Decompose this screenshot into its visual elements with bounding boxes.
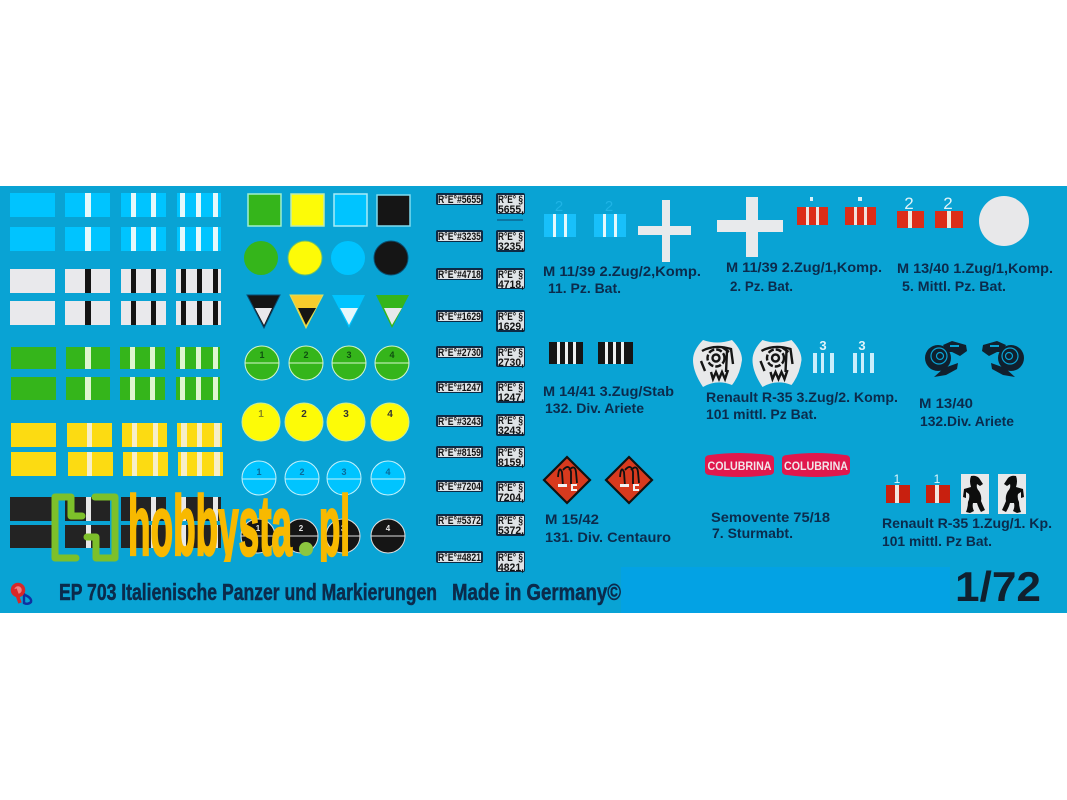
- icon: elephant shield left: [693, 340, 742, 387]
- icon: diamond right: [606, 457, 652, 503]
- numbered yellow discs: 1: [258, 409, 264, 420]
- scale: 1/72: [955, 563, 1041, 610]
- panel: long number plates: R°E°#8159: [438, 447, 481, 459]
- panel: M 13/40 132.Div. Ariete: [919, 341, 1024, 429]
- panel: M 15/42 131. Div. Centauro: [544, 457, 671, 545]
- panel: M 11/39 2.Zug/2.Komp.: 11. Pz. Bat.: [548, 280, 621, 296]
- decal sheet background: [0, 186, 1067, 613]
- panel: Semovente 75/18: [705, 453, 850, 541]
- numbered black discs: 3: [341, 524, 346, 533]
- panel: M 15/42 131. Div. Centauro: M 15/42: [545, 511, 599, 527]
- numbered blue discs: 2: [299, 467, 305, 477]
- panel: square number plates: R°E° §: [498, 482, 523, 494]
- numbered yellow discs: 3: [343, 409, 349, 420]
- panel: Renault R-35 3.Zug/2.Komp.: Renault R-35 3.Zug/2. Komp.: [706, 389, 898, 405]
- colour discs: [244, 241, 408, 275]
- yellow stripes: [11, 423, 223, 476]
- panel: M 11/39 2.Zug/2.Komp.: M 11/39 2.Zug/2,Komp.: [543, 263, 701, 279]
- numbered blue discs: 1: [256, 467, 262, 477]
- numbered blue discs: 4: [385, 467, 391, 477]
- panel: M 11/39 2.Zug/2.Komp.: 2: [605, 198, 613, 215]
- panel: Renault R-35 3.Zug/2.Komp.: 101 mittl. Pz Bat.: [706, 406, 817, 422]
- watermark logo bracket: [55, 497, 115, 558]
- panel: square number plates: 3243,: [498, 425, 524, 437]
- icon: prancing horse left: [961, 474, 989, 514]
- panel: square number plates: R°E° §: [498, 347, 523, 359]
- panel: stripe rank markings: [10, 193, 223, 548]
- panel: M 11/39 2.Zug/1.Komp.: [717, 197, 882, 294]
- panel: square number plates: R°E° §: [498, 447, 523, 459]
- lighter scale strip: [621, 567, 950, 613]
- panel: M 13/40 1.Zug/1.Komp.: 2: [904, 194, 914, 213]
- panel: long number plates: R°E°#4718: [438, 269, 481, 281]
- panel: long number plates: R°E°#4821: [438, 552, 481, 564]
- panel: square number plates: 4821,: [498, 562, 524, 574]
- numbered black discs: [241, 519, 405, 553]
- panel: Semovente 75/18: 7. Sturmabt.: [712, 525, 793, 541]
- panel: square number plates: R°E° §: [498, 382, 523, 394]
- panel: M 11/39 2.Zug/2.Komp.: 2: [555, 198, 563, 215]
- panel: Renault R-35 3.Zug/2.Komp.: 3: [858, 338, 866, 353]
- panel: square number plates: R°E° §: [498, 194, 523, 206]
- triangles: [247, 295, 409, 328]
- footer title: EP 703 Italienische Panzer und Markierungen: [59, 579, 437, 605]
- watermark: hobbysta.pl: hobbysta: [128, 479, 293, 573]
- numbered green discs: 2: [303, 350, 309, 360]
- numbered black discs: 2: [299, 524, 304, 533]
- panel: square number plates: R°E° §: [498, 269, 523, 281]
- colour squares: [248, 194, 410, 226]
- COLUBRINA badge right: [782, 453, 850, 477]
- panel: square number plates: R°E° §: [498, 311, 523, 323]
- numbered blue discs: [242, 461, 405, 495]
- panel: square number plates: 5655,: [498, 204, 524, 216]
- COLUBRINA badge left: [705, 453, 774, 477]
- white stripes: [10, 269, 221, 325]
- panel: M 14/41 3.Zug/Stab: [543, 342, 674, 416]
- icon: PD maker logo: [12, 584, 31, 604]
- numbered yellow discs: 2: [301, 409, 307, 420]
- panel: square number plates: 2730,: [498, 357, 524, 369]
- panel: square number plates: [496, 193, 525, 574]
- panel: square number plates: R°E° §: [498, 415, 523, 427]
- panel: long number plates: R°E°#5372: [438, 515, 481, 527]
- COLUBRINA badge right: COLUBRINA: [784, 459, 848, 473]
- panel: long number plates: R°E°#5655: [438, 194, 481, 206]
- panel: square number plates: 1247,: [498, 392, 524, 404]
- text: pl: [319, 479, 350, 573]
- panel: Renault R-35 3.Zug/2.Komp.: 3: [819, 338, 827, 353]
- watermark: hobbysta.pl: [52, 492, 348, 562]
- icon: diamond left: [544, 457, 590, 503]
- panel: M 14/41 3.Zug/Stab: M 14/41 3.Zug/Stab: [543, 383, 674, 399]
- panel: long number plates: [436, 193, 483, 564]
- panel: M 13/40 1.Zug/1.Komp.: [897, 194, 1053, 294]
- panel: M 13/40 1.Zug/1.Komp.: 2: [943, 194, 953, 213]
- panel: long number plates: R°E°#1247: [438, 382, 481, 394]
- panel: Renault R-35 1.Zug/1. Kp.: 1: [934, 472, 941, 486]
- panel: long number plates: R°E°#3243: [438, 416, 481, 428]
- panel: Renault R-35 1.Zug/1. Kp.: 101 mittl. Pz Bat.: [882, 533, 992, 549]
- panel: Renault R-35 1.Zug/1. Kp.: 1: [894, 472, 901, 486]
- panel: M 13/40 132.Div. Ariete: M 13/40: [919, 395, 973, 411]
- icon: prancing horse right: [998, 474, 1026, 514]
- panel: square number plates: 4718,: [498, 279, 524, 291]
- panel: square number plates: 8159,: [498, 457, 524, 469]
- panel: long number plates: R°E°#7204: [438, 481, 482, 493]
- made in Germany: Made in Germany©: [452, 579, 621, 605]
- numbered black discs: 1: [256, 524, 261, 533]
- panel: M 15/42 131. Div. Centauro: 131. Div. Centauro: [545, 529, 671, 545]
- panel: square number plates: 3235,: [498, 241, 524, 253]
- panel: square number plates: 5372,: [498, 525, 524, 537]
- icon: elephant shield right: [752, 340, 802, 387]
- numbered green discs: 4: [389, 350, 395, 360]
- numbered black discs: 4: [386, 524, 391, 533]
- icon: ram head right: [982, 341, 1024, 377]
- panel: Renault R-35 3.Zug/2.Komp.: [693, 338, 898, 422]
- panel: Renault R-35 1.Zug/1. Kp.: [882, 472, 1052, 549]
- panel: M 11/39 2.Zug/1.Komp.: 2. Pz. Bat.: [730, 278, 793, 294]
- panel: long number plates: R°E°#3235: [438, 231, 481, 243]
- numbered yellow discs: 4: [387, 409, 393, 420]
- panel: long number plates: R°E°#2730: [438, 347, 481, 359]
- panel: square number plates: R°E° §: [498, 515, 523, 527]
- panel: square number plates: 1629,: [498, 321, 524, 333]
- panel: long number plates: R°E°#1629: [438, 311, 481, 323]
- panel: square number plates: R°E° §: [498, 231, 523, 243]
- panel: M 14/41 3.Zug/Stab: 132. Div. Ariete: [545, 400, 644, 416]
- panel: M 13/40 1.Zug/1.Komp.: 5. Mittl. Pz. Bat.: [902, 278, 1006, 294]
- numbered green discs: 3: [346, 350, 352, 360]
- light blue stripes: [10, 193, 221, 251]
- black stripes: [10, 497, 221, 548]
- COLUBRINA badge left: COLUBRINA: [708, 459, 772, 473]
- numbered green discs: [245, 346, 409, 380]
- green stripes: [11, 347, 220, 400]
- panel: M 11/39 2.Zug/2.Komp.: [543, 198, 701, 296]
- numbered yellow discs: [242, 403, 409, 441]
- panel: square number plates: 7204,: [498, 492, 524, 504]
- icon: ram head left: [925, 341, 967, 377]
- numbered blue discs: 3: [341, 467, 347, 477]
- panel: M 11/39 2.Zug/1.Komp.: M 11/39 2.Zug/1,Komp.: [726, 259, 882, 275]
- panel: M 13/40 1.Zug/1.Komp.: M 13/40 1.Zug/1,Komp.: [897, 260, 1053, 276]
- panel: M 13/40 132.Div. Ariete: 132.Div. Ariete: [920, 413, 1014, 429]
- panel: square number plates: R°E° §: [498, 552, 523, 564]
- numbered green discs: 1: [259, 350, 265, 360]
- panel: squares, discs and triangles: [241, 194, 410, 553]
- panel: Semovente 75/18: Semovente 75/18: [711, 509, 830, 525]
- panel: Renault R-35 1.Zug/1. Kp.: Renault R-35 1.Zug/1. Kp.: [882, 515, 1052, 531]
